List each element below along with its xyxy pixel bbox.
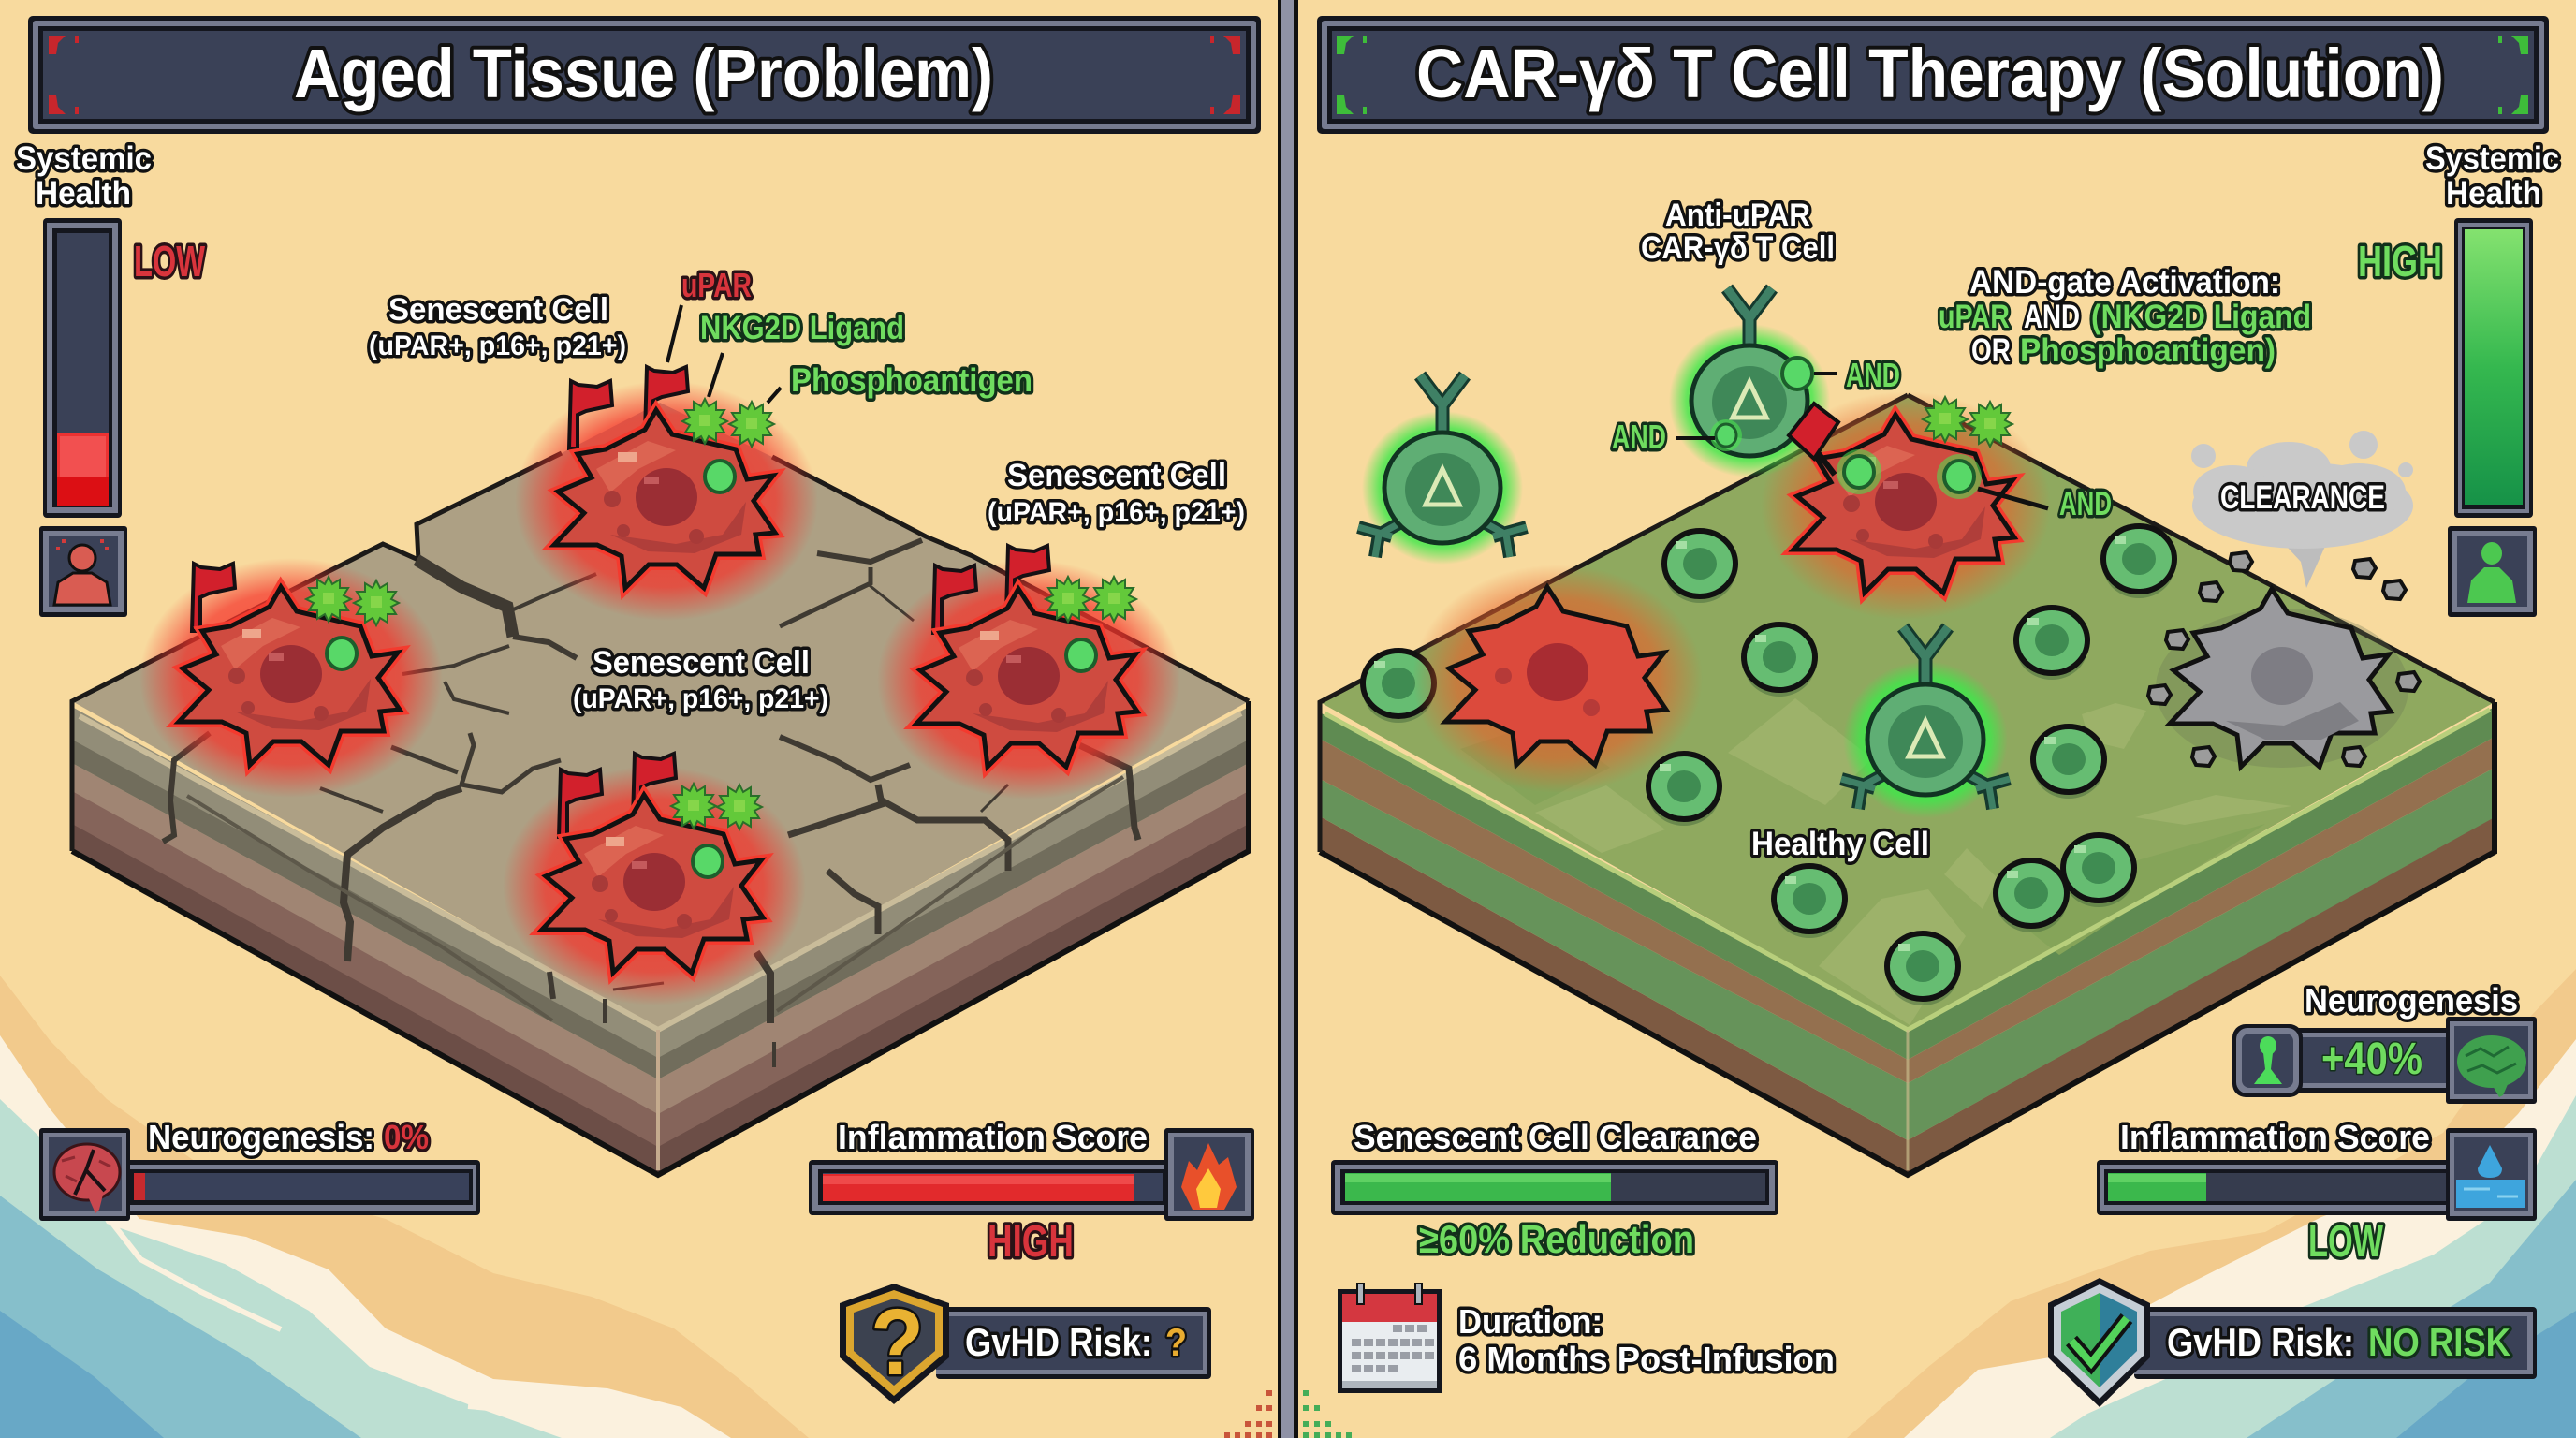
label: AND-gate activation [1939,264,2311,369]
pixel dots: green [1303,1390,1352,1438]
AND tag: left: AND [1612,418,1666,456]
label: senescent cell right: (uPAR+, p16+, p21+) [988,497,1245,528]
right systemic health meter: HIGH [2358,237,2442,286]
senescent cell: being targeted [1761,391,2051,620]
duration text [1458,1302,1835,1378]
right systemic health meter [2358,140,2559,518]
left systemic health meter [16,140,205,518]
pixel dots: red [1224,1390,1272,1438]
left isometric platform: cracked tissue [72,403,1249,1175]
clearance cloud: CLEARANCE [2220,479,2385,516]
icon: damaged brain [39,1128,130,1221]
label: senescent cell top: (uPAR+, p16+, p21+) [369,330,626,361]
neurogenesis bar: problem: 0% [384,1118,429,1156]
icon: healthy brain [2446,1017,2537,1104]
label: anti-uPAR CAR T cell: CAR-γδ T Cell [1641,230,1835,266]
left systemic health meter: Health [36,175,131,212]
icon: neuron person [2232,1024,2303,1097]
label: senescent cell center: (uPAR+, p16+, p21+) [573,683,828,714]
label: NKG2D ligand: NKG2D Ligand [700,310,904,346]
label: AND-gate activation: uPAR [1939,299,2010,335]
label: AND-gate activation: AND [2024,299,2080,335]
GvHD risk: unknown [840,1284,1211,1404]
label: NKG2D ligand [700,310,904,397]
senescent cell: bottom [503,754,806,1005]
inflammation bar: solution [2097,1118,2452,1267]
duration text: 6 Months Post-Infusion [1458,1340,1835,1378]
neurogenesis readout: solution [2232,981,2537,1104]
neurogenesis bar: problem: Neurogenesis: [148,1118,374,1156]
label: uPAR [667,266,752,362]
surface cracks [163,540,1138,1067]
AND tag: upper [1814,356,1900,394]
left systemic health meter: LOW [134,237,205,286]
label: AND-gate activation: Phosphoantigen) [2020,332,2276,369]
T cell: free-floating [1358,375,1527,565]
icon: shield question: ? [871,1290,924,1395]
inflammation bar: solution: Inflammation Score [2120,1118,2430,1156]
senescent cell: untreated [1412,565,1703,793]
divider between panels [1278,0,1298,1438]
icon: shield check [2048,1278,2150,1407]
healthy cells [1363,526,2174,1005]
senescent cell: right [877,546,1180,800]
cleared senescent cell [2148,552,2420,768]
label: senescent cell top: Senescent Cell [388,292,608,328]
GvHD risk: unknown: ? [1165,1320,1187,1364]
label: anti-uPAR CAR T cell: Anti-uPAR [1665,198,1810,233]
neurogenesis readout: solution: +40% [2321,1034,2422,1084]
AND tag: upper: AND [1846,356,1900,394]
icon: flame [1164,1128,1254,1221]
clearance cloud [2191,431,2413,588]
label: phosphoantigen: Phosphoantigen [791,362,1032,399]
T cell: on surface [1841,627,2010,818]
label: AND-gate activation: (NKG2D Ligand [2091,299,2311,335]
flag bound by T cell [1789,404,1838,475]
icon: water droplet [2446,1128,2537,1221]
neurogenesis bar: problem [122,1118,480,1215]
AND tag: right [1978,484,2112,522]
icon: calendar [1338,1284,1442,1393]
GvHD risk: unknown: GvHD Risk: [965,1320,1152,1364]
GvHD risk: none: GvHD Risk: [2167,1320,2354,1364]
label: anti-uPAR CAR T cell [1641,198,1835,266]
label: healthy cell: Healthy Cell [1751,826,1929,862]
inflammation bar: solution: LOW [2308,1217,2383,1267]
T cell: anti-uPAR engaged [1669,288,1830,477]
clearance bar: ≥60% Reduction [1419,1217,1694,1261]
clearance bar: Senescent Cell Clearance [1354,1118,1757,1156]
beach and water: left corner [0,976,809,1438]
icon: healthy person [2448,526,2537,617]
GvHD risk: none [2048,1278,2537,1407]
icon: sick person [39,526,127,617]
icon: shield question [840,1284,949,1404]
panel title: therapy [1317,16,2549,134]
left systemic health meter: Systemic [16,140,152,177]
label: senescent cell right: Senescent Cell [1007,458,1226,493]
AND tag: right: AND [2059,484,2112,522]
inflammation bar: problem: HIGH [988,1217,1074,1267]
label: senescent cell top [369,292,626,361]
neurogenesis readout: solution: Neurogenesis [2305,981,2518,1020]
label: uPAR: uPAR [681,266,752,304]
right isometric platform: healthy tissue [1320,395,2495,1175]
panel title: aged tissue [28,16,1261,134]
right systemic health meter: Systemic [2425,140,2559,177]
senescent cell: top [515,367,818,621]
label: senescent cell center: Senescent Cell [593,645,810,681]
label: AND-gate activation: OR [1971,332,2011,369]
inflammation bar: problem: Inflammation Score [838,1118,1148,1156]
clearance bar [1331,1118,1778,1261]
panel title: therapy: CAR-γδ T Cell Therapy (Solution) [1416,35,2444,112]
senescent cell: left [139,558,443,798]
beach and water: right corner [1847,969,2576,1438]
duration text: Duration: [1458,1302,1603,1341]
panel title: aged tissue: Aged Tissue (Problem) [294,35,993,112]
right systemic health meter: Health [2446,175,2541,212]
inflammation bar: problem [809,1118,1174,1267]
label: senescent cell right [988,458,1245,528]
GvHD risk: none: NO RISK [2368,1320,2510,1364]
label: AND-gate activation: AND-gate Activation: [1969,264,2280,301]
label: senescent cell center [573,645,828,714]
